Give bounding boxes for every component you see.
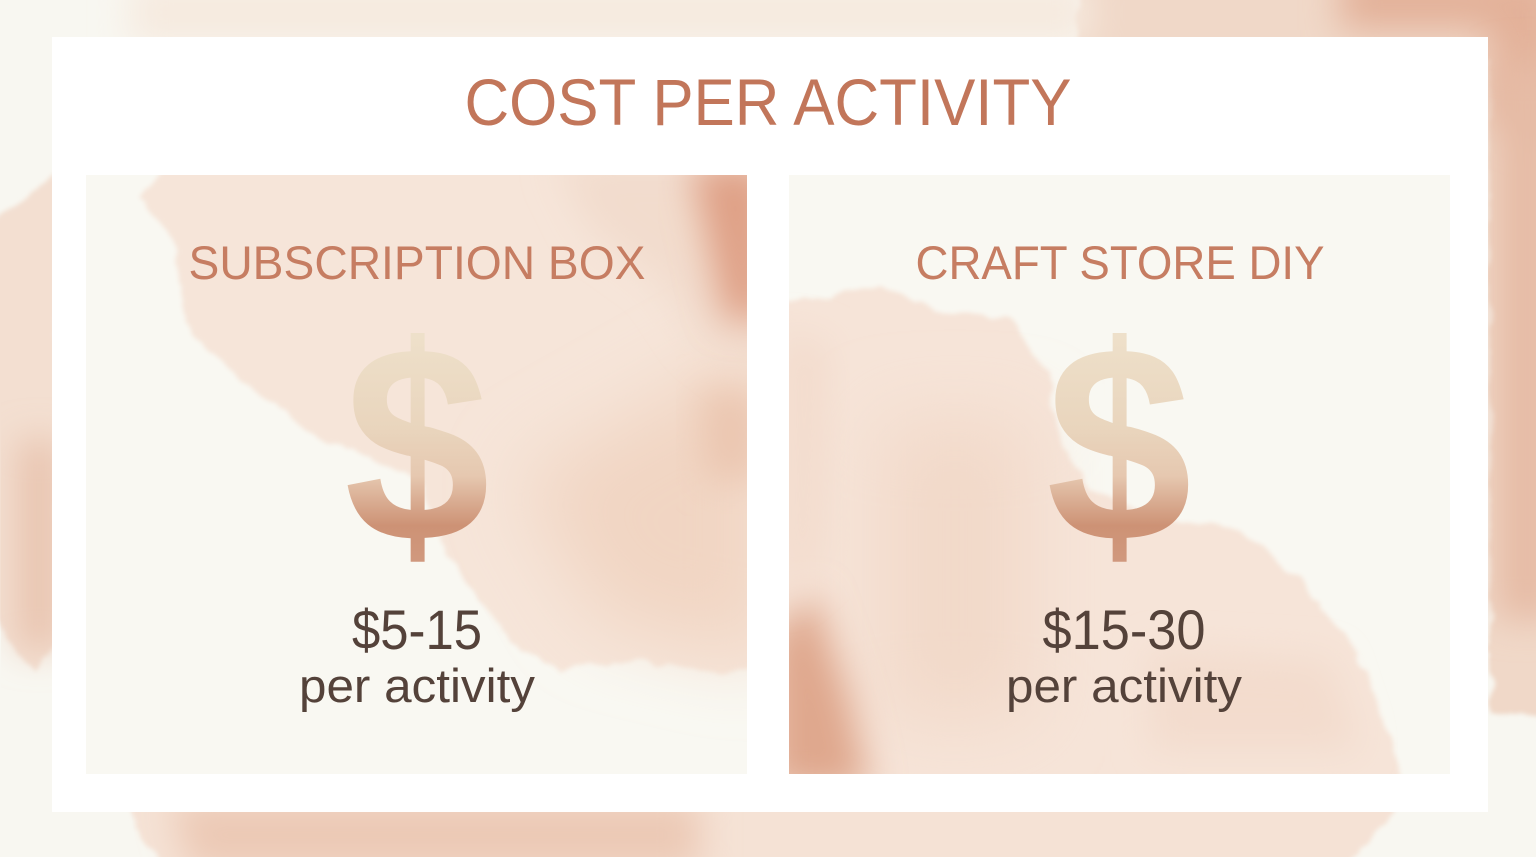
heading: subscription box: SUBSCRIPTION BOX <box>188 236 646 289</box>
unit label: per activity <box>299 659 536 712</box>
icon: dollar sign: $ <box>1046 288 1192 601</box>
panel: subscription box <box>86 160 780 774</box>
price: 15 to 30: $15-30 <box>1042 598 1206 661</box>
heading: craft store DIY: CRAFT STORE DIY <box>916 236 1324 289</box>
icon: dollar sign: $ <box>344 288 490 601</box>
panel background with watercolor wash <box>770 175 1450 790</box>
panel: craft store DIY <box>770 175 1450 790</box>
unit label: per activity <box>1006 659 1243 712</box>
price: 5 to 15: $5-15 <box>352 598 482 661</box>
title: COST PER ACTIVITY <box>464 65 1072 139</box>
panel background with watercolor wash <box>86 160 780 774</box>
